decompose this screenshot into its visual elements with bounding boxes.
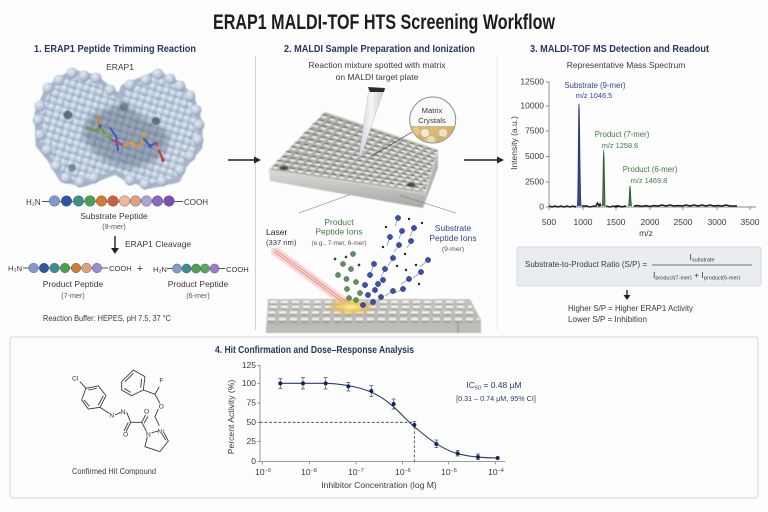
substrate peptide label: Substrate Peptide bbox=[80, 211, 148, 221]
substrate peak label bbox=[564, 81, 626, 100]
icon: hit compound structure: O bbox=[159, 403, 164, 410]
mass spectrum chart: 12500 bbox=[520, 76, 544, 86]
zoom guide lines bbox=[299, 195, 456, 213]
x tick labels: −6 bbox=[405, 468, 411, 474]
crystal label: Matrix bbox=[422, 106, 443, 115]
S/P ratio formula box: substrate bbox=[692, 258, 714, 264]
mass spectrum chart: 2000 bbox=[641, 217, 660, 227]
icon: hit compound structure: N bbox=[146, 431, 151, 438]
IC50 annotation bbox=[456, 380, 536, 403]
6-mer peak label bbox=[623, 165, 678, 185]
mass spectrum chart: 3000 bbox=[708, 217, 727, 227]
icon: matrix crystals magnifier: Crystals bbox=[418, 116, 446, 125]
IC50 annotation: [0.31 – 0.74 μM, 95% CI] bbox=[456, 394, 536, 403]
mass spectrum chart: Intensity (a.u.) bbox=[509, 116, 519, 170]
IC50 annotation: = 0.48 μM bbox=[481, 380, 522, 390]
product length 6-mer: (6-mer) bbox=[186, 291, 210, 300]
x tick labels: −9 bbox=[265, 468, 271, 474]
interpretation text: Higher S/P = Higher ERAP1 Activity bbox=[568, 303, 694, 313]
arrow: ratio to interpretation bbox=[624, 290, 630, 300]
icon: hit compound structure: F bbox=[159, 377, 163, 384]
x tick labels: 10 bbox=[255, 467, 265, 477]
7-mer peak label bbox=[595, 130, 650, 150]
mass spectrum chart: 500 bbox=[542, 217, 556, 227]
y tick labels: 100 bbox=[242, 378, 256, 388]
laser label: Laser bbox=[266, 227, 287, 237]
product length 7-mer: (7-mer) bbox=[61, 291, 85, 300]
S/P ratio formula box: product(6-mer) bbox=[704, 276, 740, 282]
IC50 annotation: IC bbox=[466, 380, 475, 390]
product ions label: Peptide Ions bbox=[315, 226, 363, 236]
mass spectrum chart: 7500 bbox=[525, 126, 544, 136]
icon: matrix crystals magnifier bbox=[408, 97, 458, 146]
icon: hit compound structure: O bbox=[144, 408, 149, 415]
arrow: step 1 to step 2 bbox=[228, 156, 261, 164]
x tick labels: 10 bbox=[301, 467, 311, 477]
caption line 2: on MALDI target plate bbox=[336, 72, 419, 82]
mass spectrum chart: 5000 bbox=[525, 151, 544, 161]
7-mer peak label: Product (7-mer) bbox=[595, 130, 650, 139]
S/P ratio formula box: + I bbox=[692, 270, 704, 280]
mass spectrum chart: 2500 bbox=[525, 176, 544, 186]
heading 4: 4. Hit Confirmation and Dose–Response Analysis bbox=[215, 344, 414, 356]
interpretation text: Lower S/P = Inhibition bbox=[568, 314, 647, 324]
heading 2: 2. MALDI Sample Preparation and Ionization bbox=[284, 43, 475, 55]
substrate peptide length: (9-mer) bbox=[102, 222, 126, 231]
6-mer peak label: Product (6-mer) bbox=[623, 165, 678, 174]
caption: Reaction mixture spotted with matrix bbox=[308, 60, 446, 70]
x tick labels: 10 bbox=[348, 467, 358, 477]
product peptide 7-mer chain: H₃N bbox=[8, 264, 22, 273]
plus sign: + bbox=[137, 263, 143, 275]
arrow: cleavage bbox=[111, 236, 119, 254]
mass spectrum chart: 1000 bbox=[574, 217, 593, 227]
laser beam bbox=[275, 251, 350, 306]
product ions label bbox=[311, 217, 367, 247]
divider right bbox=[496, 56, 498, 330]
x tick labels: 10 bbox=[441, 467, 451, 477]
7-mer peak label: m/z 1258.6 bbox=[602, 141, 638, 150]
product label 6-mer: Product Peptide bbox=[168, 279, 229, 289]
x tick labels: 10 bbox=[395, 467, 405, 477]
product ions label: (e.g., 7-mer, 6-mer) bbox=[311, 240, 367, 247]
x tick labels: −4 bbox=[498, 468, 504, 474]
S/P ratio formula box: I bbox=[653, 270, 655, 280]
y tick labels bbox=[242, 360, 256, 466]
product peptide 6-mer chain: H₂N bbox=[153, 265, 167, 274]
icon: lower plate section bbox=[266, 299, 481, 333]
icon: hit compound structure: Cl bbox=[72, 376, 79, 383]
icon: hit compound structure bbox=[72, 370, 168, 452]
x tick labels: −7 bbox=[358, 468, 364, 474]
y tick labels: 125 bbox=[242, 360, 256, 370]
compound caption: Confirmed Hit Compound bbox=[72, 466, 156, 476]
interpretation text bbox=[568, 303, 694, 324]
cleavage label: ERAP1 Cleavage bbox=[125, 239, 191, 249]
x tick labels: −5 bbox=[451, 468, 457, 474]
y axis title: Percent Activity (%) bbox=[226, 380, 236, 454]
reaction buffer note: Reaction Buffer: HEPES, pH 7.5, 37 °C bbox=[43, 313, 171, 323]
panel: MALDI-TOF detection and readout bbox=[509, 43, 761, 324]
divider left bbox=[254, 56, 256, 330]
mass spectrum chart: 0 bbox=[539, 202, 544, 212]
protein label: ERAP1 bbox=[106, 62, 134, 72]
icon: hit compound structure: O bbox=[123, 431, 128, 438]
x tick labels: 10 bbox=[488, 467, 498, 477]
substrate ions label: Peptide Ions bbox=[429, 233, 477, 243]
x tick labels bbox=[255, 467, 504, 477]
substrate ions cloud bbox=[360, 215, 431, 308]
y tick labels: 75 bbox=[247, 398, 256, 408]
substrate peptide chain bbox=[26, 196, 208, 207]
S/P ratio formula box: I bbox=[690, 252, 692, 262]
6-mer peak label: m/z 1469.8 bbox=[631, 176, 667, 185]
substrate peptide chain: COOH bbox=[184, 198, 208, 207]
substrate ions label: (9-mer) bbox=[442, 246, 464, 253]
y axis and x axis bbox=[257, 365, 505, 464]
panel: ERAP1 peptide trimming reaction bbox=[8, 43, 249, 323]
product label 7-mer: Product Peptide bbox=[43, 279, 104, 289]
S/P ratio formula box: product(7-mer) bbox=[655, 276, 692, 282]
heading 3: 3. MALDI-TOF MS Detection and Readout bbox=[530, 43, 709, 55]
panel: MALDI sample preparation bbox=[266, 43, 481, 333]
y tick labels: 0 bbox=[251, 456, 256, 466]
icon: hit compound structure: N⁺ bbox=[157, 428, 166, 435]
title: ERAP1 MALDI-TOF HTS Screening Workflow bbox=[213, 11, 556, 34]
dose-response chart bbox=[226, 360, 536, 490]
mass spectrum chart: 2500 bbox=[674, 217, 693, 227]
product peptide 6-mer chain: COOH bbox=[226, 265, 249, 274]
icon: hit compound structure: N bbox=[109, 412, 114, 419]
S/P ratio formula box: Substrate-to-Product Ratio (S/P) = bbox=[525, 259, 647, 269]
mass spectrum chart: m/z bbox=[639, 228, 653, 238]
product peptide 7-mer chain bbox=[8, 263, 132, 273]
x tick labels: −8 bbox=[311, 468, 317, 474]
product peptide 6-mer chain bbox=[153, 264, 249, 274]
icon: hit compound structure: N bbox=[121, 409, 126, 416]
S/P ratio formula box bbox=[517, 247, 761, 286]
arrow: step 2 to step 3 bbox=[464, 156, 504, 164]
substrate peak label: Substrate (9-mer) bbox=[564, 81, 626, 90]
mass spectrum chart: 10000 bbox=[520, 100, 544, 110]
ablation burst bbox=[325, 298, 377, 316]
panel: hit confirmation and dose-response bbox=[10, 337, 758, 498]
substrate ions label bbox=[429, 223, 477, 253]
IC50 annotation: 50 bbox=[475, 386, 481, 392]
mass spectrum chart: 1500 bbox=[607, 217, 626, 227]
product ions cloud bbox=[334, 251, 363, 303]
substrate peak label: m/z 1046.5 bbox=[576, 91, 612, 100]
icon: MALDI target plate bbox=[269, 112, 438, 208]
spectrum caption: Representative Mass Spectrum bbox=[567, 60, 685, 70]
leader line to crystals bbox=[372, 132, 412, 156]
mass spectrum chart bbox=[509, 76, 760, 238]
product peptide 7-mer chain: COOH bbox=[109, 264, 132, 273]
icon: ERAP1 protein surface with bound peptide bbox=[32, 68, 204, 190]
y tick labels: 50 bbox=[247, 417, 256, 427]
substrate ions label: Substrate bbox=[435, 223, 471, 233]
product ions label: Product bbox=[324, 217, 354, 227]
laser wavelength: (337 nm) bbox=[266, 238, 297, 247]
y tick labels: 25 bbox=[247, 436, 256, 446]
mass spectrum chart: 3500 bbox=[741, 217, 760, 227]
x axis title: Inhibitor Concentration (log M) bbox=[321, 480, 437, 490]
substrate peptide chain: H₂N bbox=[26, 198, 41, 207]
icon: pipette tip bbox=[359, 87, 385, 156]
heading 1: 1. ERAP1 Peptide Trimming Reaction bbox=[34, 43, 196, 55]
